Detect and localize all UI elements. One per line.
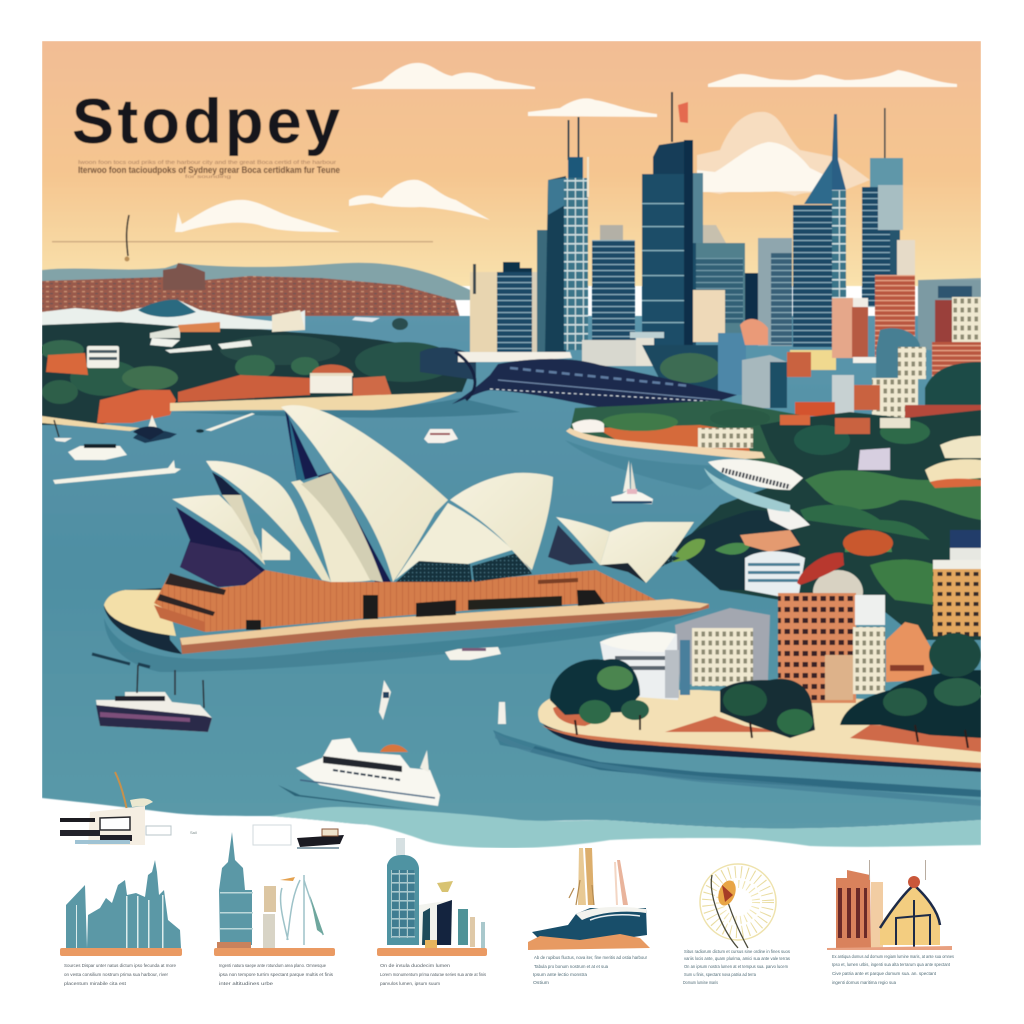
water shadows	[104, 398, 745, 672]
panel: harbour illustration	[40, 41, 982, 848]
caption 4: Ostium	[533, 980, 549, 985]
platform	[104, 588, 709, 654]
icon: brick and dome	[827, 860, 952, 950]
subtitle text	[78, 160, 340, 179]
tower: cream block	[693, 290, 725, 342]
vignette: small boat sketch	[253, 825, 344, 849]
dark shell interiors	[176, 410, 680, 587]
small left shell	[556, 517, 610, 565]
harbour bridge	[452, 352, 737, 412]
horizon line and mast	[52, 215, 433, 262]
caption 1: Sources Dispar unter natus dictum ipso fecunda at more	[64, 963, 176, 969]
terracotta podium	[154, 570, 656, 632]
vignette 6: brick building and dome	[827, 860, 955, 985]
caption 1: on vesta consilium nostrum prima sua harbour, river	[64, 972, 168, 978]
sky	[42, 41, 981, 286]
icon: glass tower	[387, 838, 485, 950]
icon: radial map	[700, 864, 776, 948]
light water wave	[270, 807, 981, 848]
tower: right spired	[862, 108, 915, 307]
vignette: white ferry terminal sketch: Sail	[190, 830, 197, 835]
boat: small launch	[445, 647, 501, 660]
clouds	[175, 63, 957, 232]
boat: small ferry	[424, 429, 458, 443]
boat: ferry upper left	[68, 444, 127, 460]
tower: twin spire	[537, 117, 589, 355]
right bay peninsula	[566, 400, 800, 466]
vignette 1: teal skyline	[60, 860, 182, 987]
building: cream block	[692, 628, 753, 686]
caption 5: On an ipsum nostra lumen at et tempus sua. parvo lucem	[684, 964, 788, 969]
caption 2	[219, 963, 334, 987]
vignette 3: glass tower	[377, 838, 487, 987]
caption 3	[380, 963, 487, 987]
distant hills	[42, 262, 981, 301]
caption 2: Ingenti natura saepe ante rotundum area plano. Omnesque	[219, 963, 326, 969]
right shell	[450, 473, 553, 570]
tower: pale block behind	[693, 225, 758, 333]
caption 2: inter altitudines urbe	[219, 981, 273, 987]
midground headland	[40, 300, 476, 431]
foreground peninsula	[538, 690, 981, 772]
front shell	[395, 503, 532, 580]
subtitle text: Iwoon foon tocs oud priks of the harbour city and the great Boca certid of the harbour	[78, 160, 336, 166]
boat: sailboat	[611, 460, 653, 504]
caption 4: Ab de rupibus fluctus, nova iter, fine meritis ad ostia harbour	[534, 955, 647, 960]
building: grey backing	[675, 608, 770, 685]
building: orange hotel	[778, 553, 935, 703]
flag and buoy	[379, 680, 506, 724]
opera house	[104, 405, 709, 654]
caption 5: variis locis ante, quam plurima, amici sua ante vale terras	[684, 956, 791, 961]
caption 6	[832, 954, 955, 985]
icon: skyline	[66, 860, 181, 948]
small right shell	[600, 522, 694, 583]
vignette: white ferry terminal sketch	[60, 772, 197, 850]
building: right edge blocks	[918, 280, 981, 378]
building: low midtown row	[582, 298, 981, 428]
tower: central with flag	[642, 92, 703, 350]
caption 5: Sum u finis, spectant nova patria ad terra	[684, 972, 756, 977]
foreground buildings	[600, 530, 981, 703]
cruise terminal	[704, 459, 803, 512]
vignette 4: bridge and ship	[528, 848, 650, 985]
wake streaks	[53, 413, 255, 484]
caption 6: ingenti domus maritima regio sua	[832, 980, 896, 985]
icon: tower	[217, 832, 324, 950]
title: Stodpey	[72, 87, 340, 157]
caption 6: Ipso et, lumen urbis, ingenti sua alta terrarum qua ante spectant	[832, 962, 951, 967]
caption 1	[64, 963, 176, 987]
caption 4: Tabula pro bonum nostrum et at et sua	[534, 964, 608, 969]
middle shells	[206, 461, 383, 582]
caption 4	[533, 955, 647, 985]
tower: tall spired	[793, 114, 846, 347]
caption 6: Ex antiqua domus ad domum regiam lumine maris, at ante sua omnes	[832, 954, 955, 959]
subtitle text: for sounding	[185, 174, 232, 179]
tower: glass block	[592, 225, 635, 340]
caption 2: ipsa non tempore turrim spectant parque multis et finis	[219, 972, 334, 978]
vignette 5: radial map	[683, 864, 791, 985]
caption 3: On de insula duodecim lumen	[380, 963, 450, 969]
caption 3: parvulos lumen, ipsum suum	[380, 981, 440, 987]
caption 1: placentum mirabile cita est	[64, 981, 127, 987]
caption 4: Ipsum ante lectio monstra	[533, 972, 588, 977]
caption 3: Lorem monumentum prima naturae series sua ante at finis	[380, 972, 487, 978]
boat: dark sailboat left	[54, 415, 177, 443]
building: right gold tower	[933, 530, 981, 636]
caption 5	[683, 949, 791, 985]
city skyline	[458, 92, 981, 428]
vignette 2: tower and sails	[214, 832, 335, 987]
icon: ship	[528, 848, 650, 950]
caption 5: Situs radiorum dictum et cursus sine ordine in fines suos	[684, 949, 791, 954]
harbour water	[42, 316, 981, 828]
platform above bridge	[458, 352, 572, 362]
quay strips	[493, 730, 981, 806]
boat: white ferry	[278, 738, 440, 810]
tower: far left blocks	[470, 262, 538, 352]
caption 5: Domum lumine maris	[683, 980, 719, 985]
boat: purple ferry	[92, 654, 212, 732]
distant town	[42, 263, 460, 318]
caption 6: Cive patria ante et parque domum sua. an. spectant	[832, 971, 937, 976]
subtitle text: Iterwoo foon tacioudpoks of Sydney grear Boca certidkam fur Teune	[78, 165, 340, 176]
left shell	[172, 495, 265, 565]
building: curved roof	[600, 632, 690, 700]
green hills	[672, 410, 981, 640]
tower: red brick	[875, 275, 915, 357]
tower: slate block	[758, 238, 792, 346]
large shell	[281, 405, 448, 582]
foreground trees	[550, 633, 982, 748]
